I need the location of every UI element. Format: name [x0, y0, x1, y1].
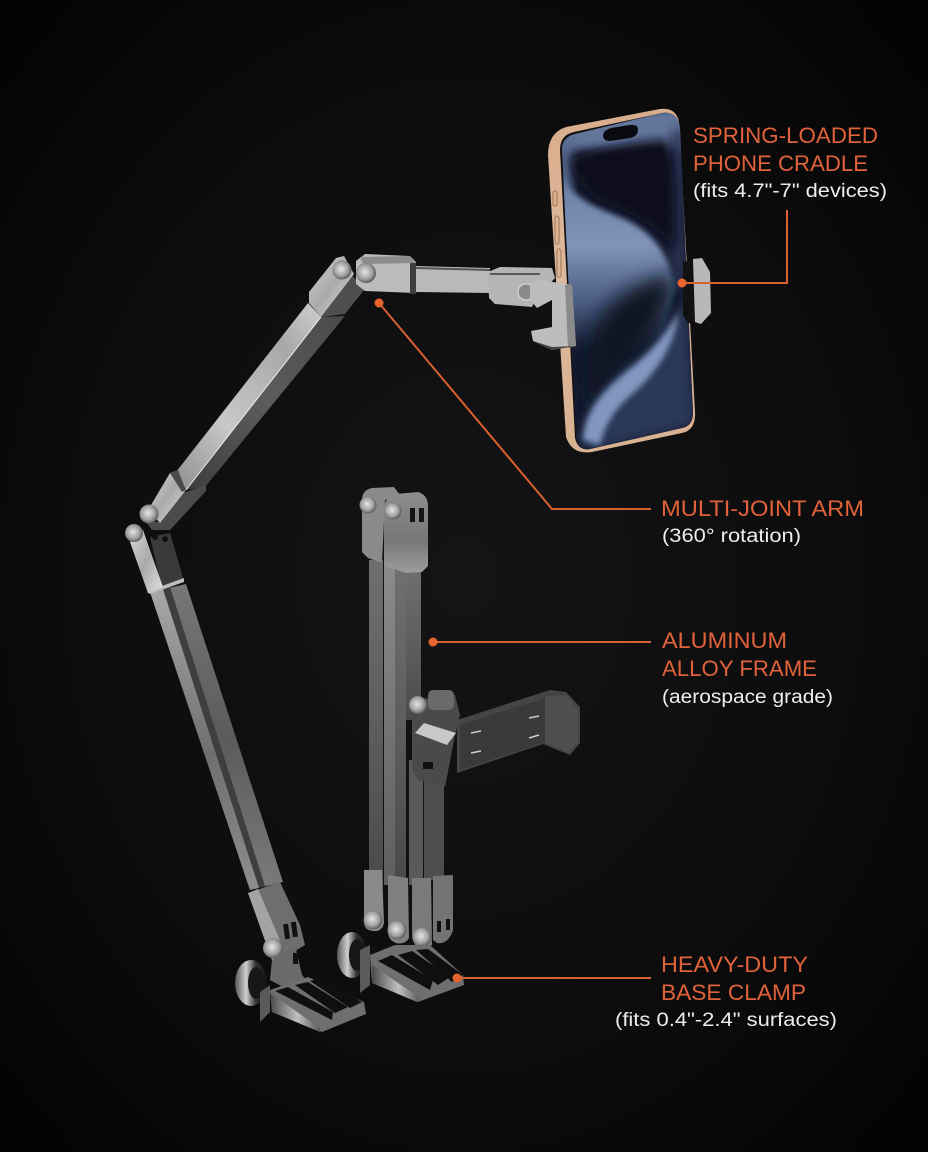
label: arm: MULTI-JOINT ARM [661, 496, 864, 521]
callout: aluminum frame [428, 628, 833, 708]
cradle hinge block [488, 267, 555, 307]
label: frame: ALUMINUM [662, 628, 787, 653]
callout: base clamp: (fits 0.4"-2.4" surfaces) [615, 1010, 837, 1031]
clamp knob [337, 932, 367, 978]
folded bars [369, 560, 444, 885]
second base clamp [337, 932, 464, 1002]
multi-joint extended arm [125, 254, 555, 890]
bottom brackets [364, 870, 453, 948]
lower arm bar [150, 584, 283, 890]
camera cutout [603, 125, 638, 141]
clamp knob [235, 960, 267, 1006]
callout: base clamp: BASE CLAMP [661, 980, 806, 1005]
side buttons [553, 191, 561, 277]
callout: phone cradle: (fits 4.7"-7" devices) [693, 181, 887, 202]
phone screen wallpaper [562, 112, 693, 450]
label: cradle: SPRING-LOADED [693, 123, 878, 148]
dot: frame [428, 638, 438, 646]
dot: arm [374, 298, 384, 308]
horizontal link to cradle [356, 254, 490, 294]
callout: multi-joint arm [374, 298, 864, 547]
phone cradle right clip [683, 258, 711, 324]
top folded brackets [360, 487, 428, 573]
phone frame [548, 109, 695, 452]
dot: cradle [678, 278, 686, 288]
dot: clamp [452, 974, 462, 982]
folded mount hinge [409, 690, 460, 787]
elbow joint lower link [130, 530, 184, 594]
phone [548, 100, 700, 460]
clamp body [360, 945, 370, 993]
label: clamp: HEAVY-DUTY [661, 952, 808, 977]
callout: phone cradle: PHONE CRADLE [693, 151, 868, 176]
folded cradle mount plate [457, 690, 580, 773]
clamp body [260, 985, 270, 1022]
phone cradle left clip [530, 280, 576, 350]
leader line: clamp [457, 977, 651, 979]
first base clamp [235, 882, 366, 1032]
elbow bracket [125, 470, 206, 542]
leader line: frame [433, 641, 651, 643]
callout: base clamp [452, 952, 837, 1031]
folded arm [360, 487, 580, 948]
callout: aluminum frame: (aerospace grade) [662, 687, 833, 708]
leader line: cradle [682, 210, 787, 283]
callout: phone cradle [678, 123, 887, 288]
elbow bracket above first clamp [248, 882, 308, 988]
leader line: arm [379, 303, 651, 509]
callout: aluminum frame: ALLOY FRAME [662, 656, 817, 681]
shoulder bracket [309, 256, 364, 317]
upper arm bar [176, 303, 345, 490]
callout: multi-joint arm: (360° rotation) [662, 526, 801, 547]
phone glass edge [560, 113, 693, 449]
